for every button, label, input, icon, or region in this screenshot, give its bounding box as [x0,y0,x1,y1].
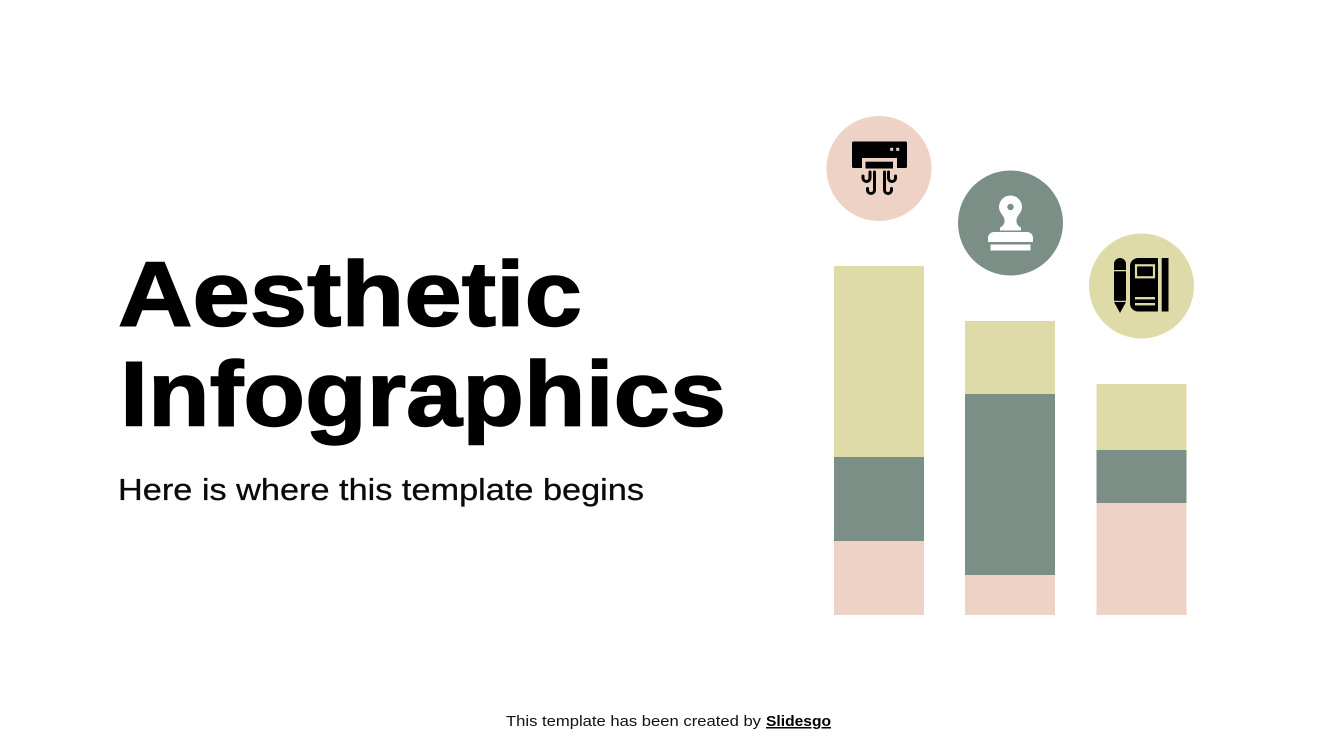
icon: notebook and pencil [1089,234,1194,338]
subtitle: Here is where this template begins [118,472,644,507]
title: Infographics [120,344,726,446]
footer credit: This template has been created by [506,713,762,730]
bar 2 [965,321,1055,615]
bar 1 [834,266,924,615]
icon: stamp [958,170,1063,276]
title: Aesthetic [118,244,582,346]
icon: air conditioner [826,116,932,221]
footer credit: Slidesgo [766,713,831,730]
stacked bar chart [834,266,1186,615]
title [118,244,726,446]
bar 3 [1096,384,1186,615]
